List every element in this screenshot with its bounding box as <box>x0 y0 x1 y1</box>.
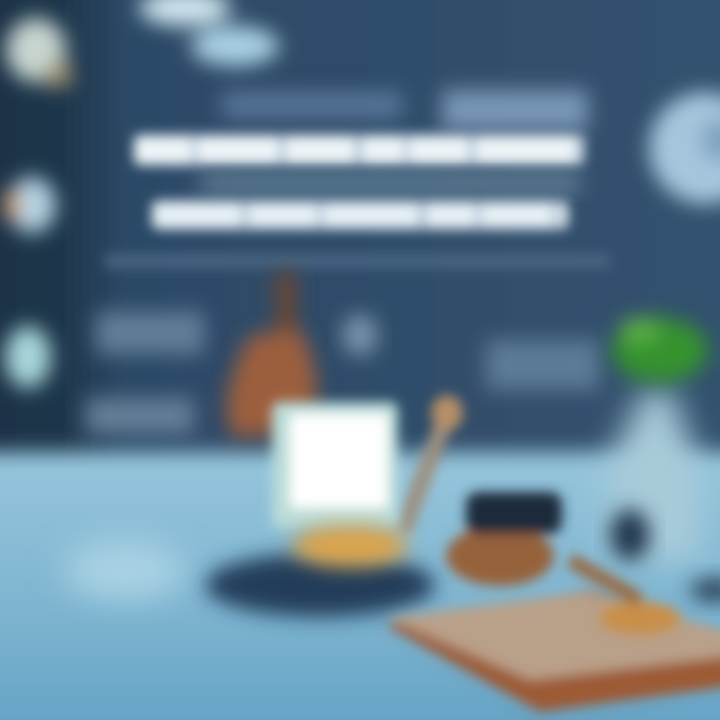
table highlight <box>65 540 185 600</box>
table surface <box>0 452 720 720</box>
right circle icon <box>649 92 720 204</box>
icon: middle shelf item <box>3 177 56 233</box>
title <box>134 90 588 230</box>
wooden cutting board <box>385 590 720 712</box>
dark bottle base <box>610 509 650 561</box>
dark object right edge <box>690 578 720 602</box>
wall background <box>0 0 720 470</box>
right text block <box>486 340 600 390</box>
white mug <box>272 402 398 528</box>
left column icons <box>3 18 72 388</box>
icon: top shelf item <box>6 18 72 88</box>
orange food on plate <box>292 525 408 567</box>
left text block top <box>96 312 204 354</box>
title line 1 <box>134 134 584 166</box>
top clouds <box>139 0 279 66</box>
spoon <box>405 395 463 525</box>
title middle band <box>200 174 580 192</box>
plant <box>612 318 708 382</box>
glass bottle <box>608 390 701 560</box>
jar <box>446 492 562 586</box>
dark plate <box>205 553 435 617</box>
left text block bottom <box>86 398 194 434</box>
title line 2 <box>152 200 568 230</box>
subtitle <box>105 254 610 268</box>
icon: lower shelf item <box>5 326 51 388</box>
food on cutting board <box>570 560 680 634</box>
centre small icon <box>342 314 378 356</box>
hanging wooden board <box>226 272 317 437</box>
title overline <box>222 90 588 130</box>
